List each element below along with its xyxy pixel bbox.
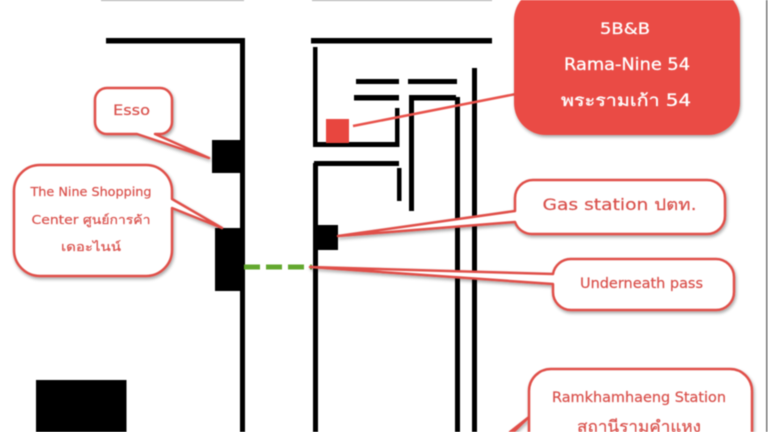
callout: Esso [95, 88, 209, 158]
callout: The Nine Shopping Center: Center ศูนย์การค้า [32, 213, 150, 228]
callout: 5B&B: พระรามเก้า 54 [561, 91, 691, 110]
callout: Ramkhamhaeng Station [505, 369, 752, 432]
callout: 5B&B [353, 0, 740, 135]
road network [106, 38, 492, 432]
callout: Underneath pass [310, 259, 734, 310]
callout: Esso: Esso [113, 103, 150, 119]
callout: Gas station [338, 180, 725, 236]
callout: Underneath pass: Underneath pass [580, 276, 703, 292]
callout: The Nine Shopping Center: The Nine Shopping [29, 185, 151, 199]
callout: The Nine Shopping Center [14, 165, 222, 276]
landmark: Esso block [212, 140, 241, 173]
right border [766, 0, 768, 432]
underpass dashed line [244, 264, 312, 270]
landmark: gas station block [318, 225, 338, 250]
top edge remnants [101, 0, 492, 1]
marker: 5B&B location [326, 119, 349, 143]
callout: Ramkhamhaeng Station: Ramkhamhaeng Station [552, 390, 726, 406]
callout: Gas station: Gas station ปตท. [542, 195, 696, 214]
callout: 5B&B: Rama-Nine 54 [564, 55, 690, 74]
landmark: The Nine block [215, 228, 241, 291]
landmark: station block [36, 380, 126, 432]
callout: 5B&B: 5B&B [600, 19, 650, 38]
callout: The Nine Shopping Center: เดอะไนน์ [61, 240, 121, 254]
